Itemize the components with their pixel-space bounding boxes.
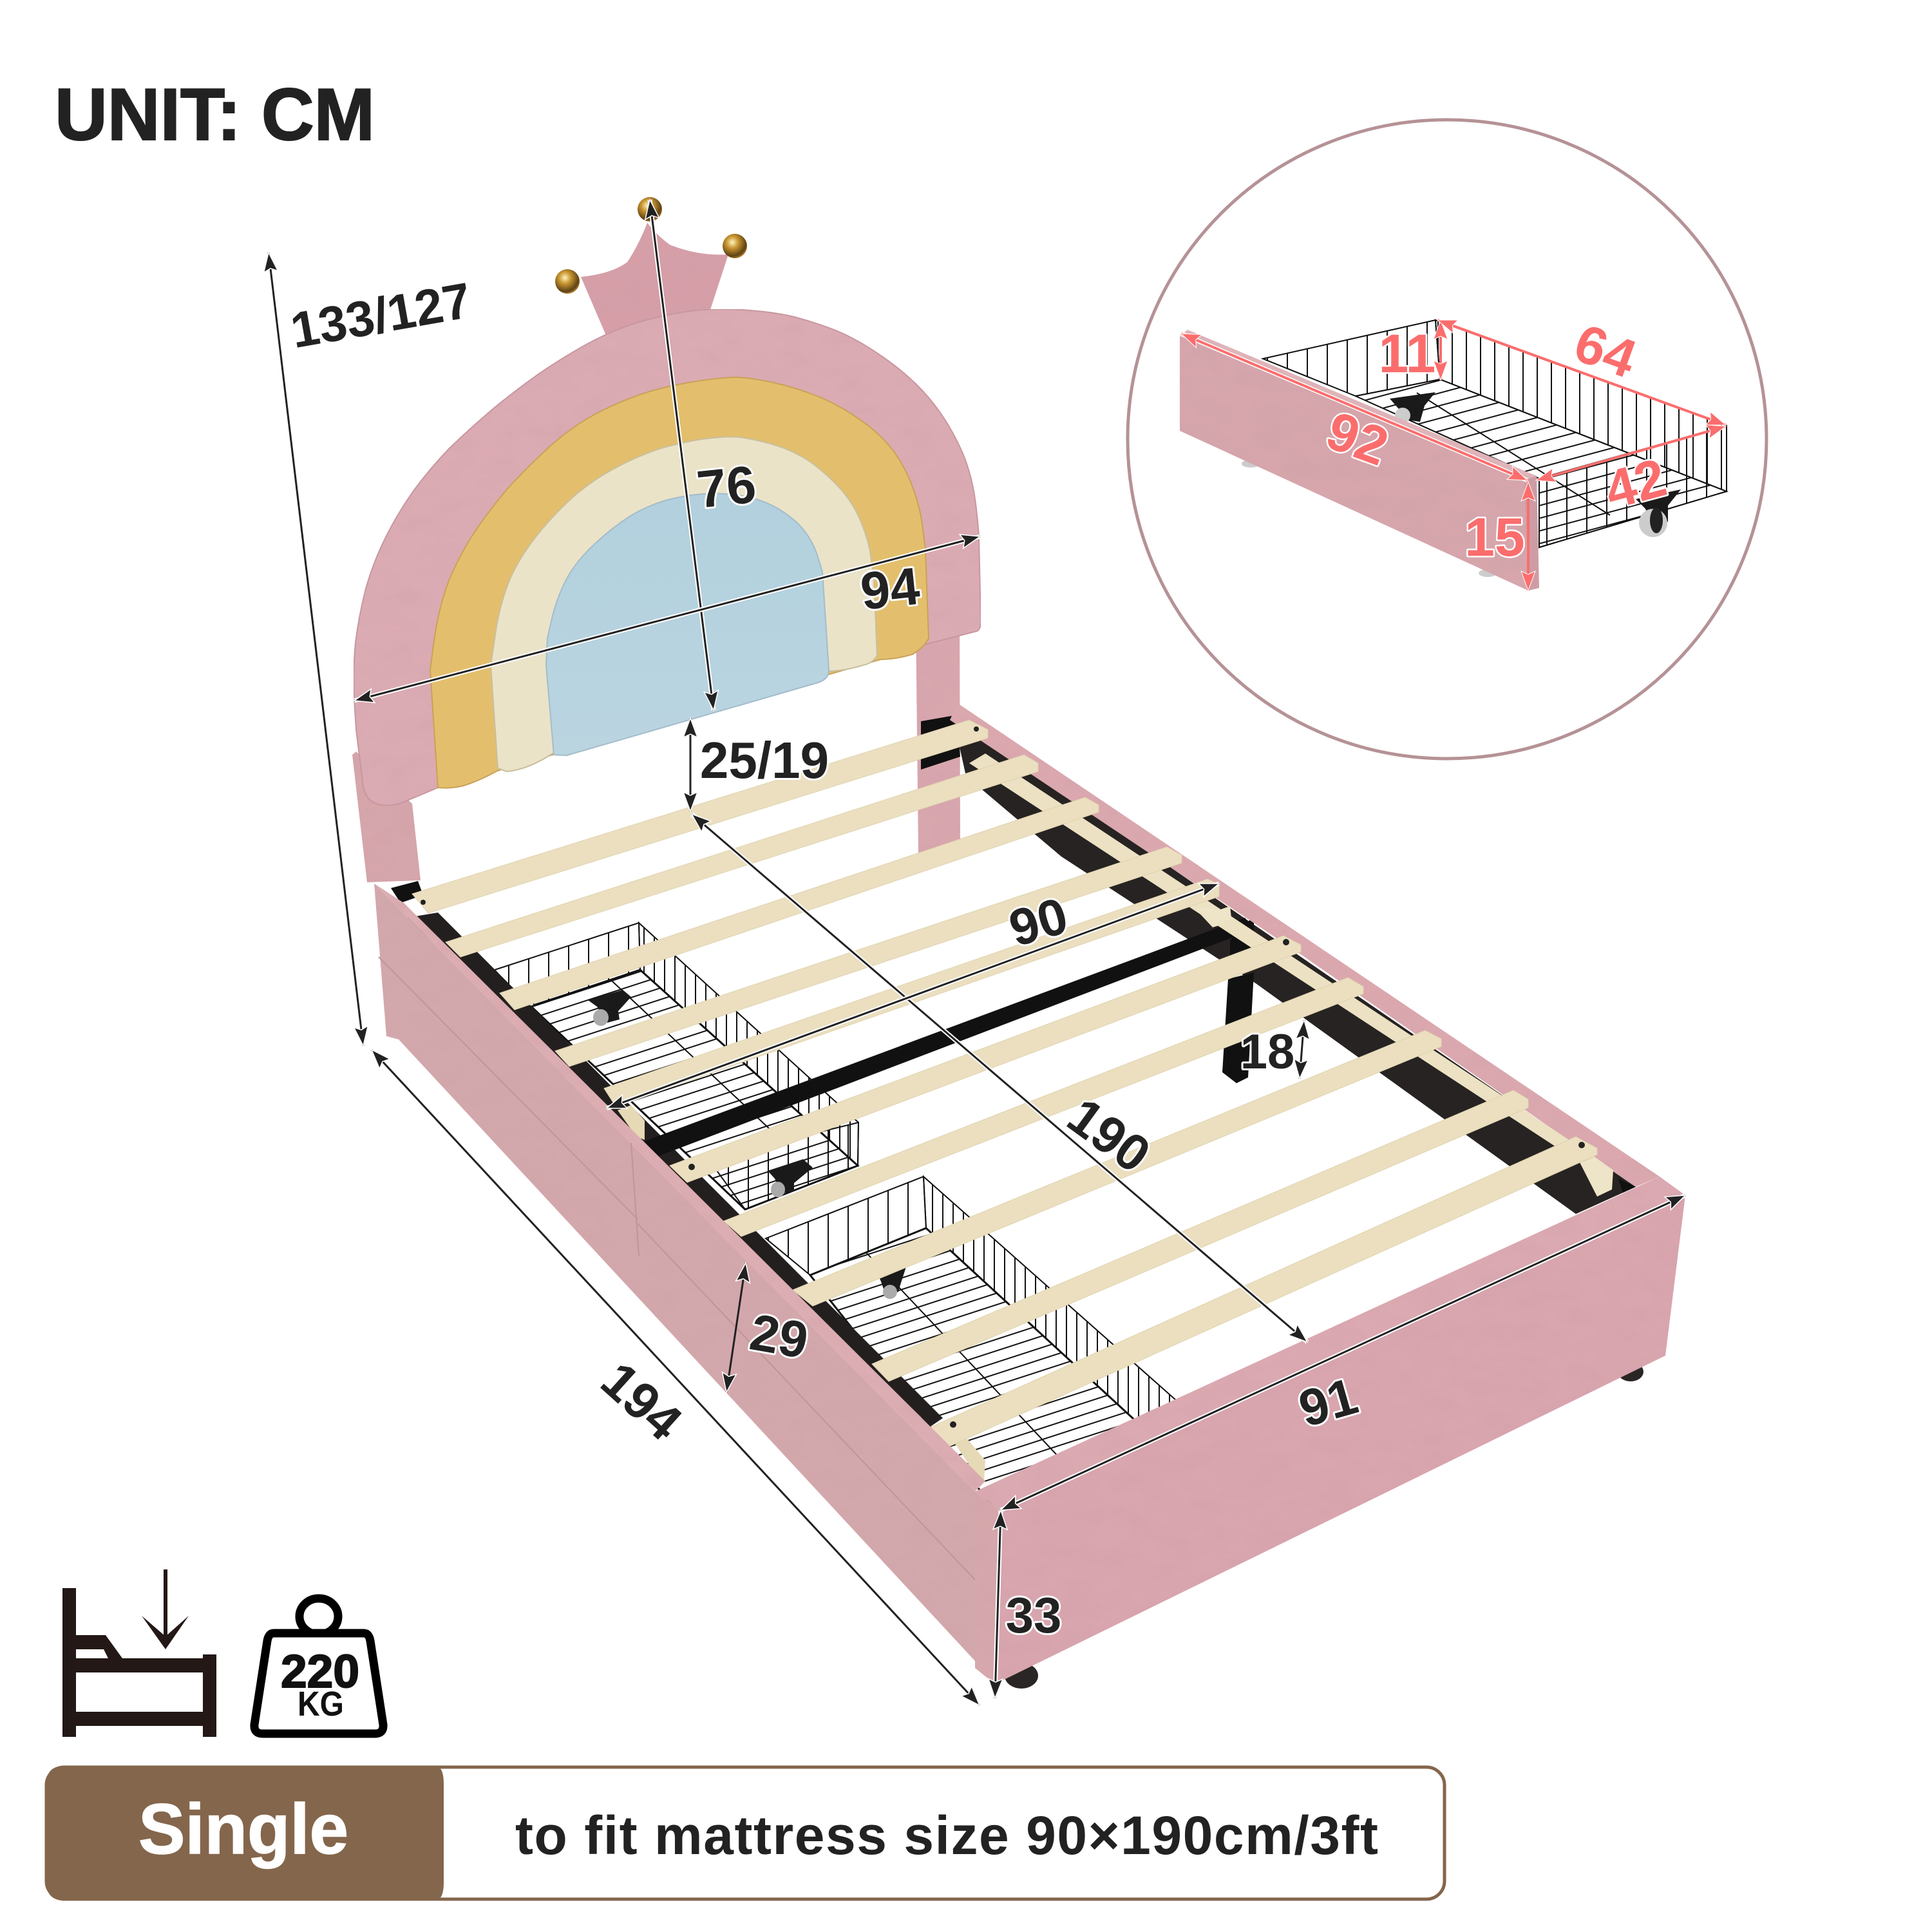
inset drawer front panel	[1180, 330, 1539, 591]
arrow: overall width	[1001, 1195, 1685, 1510]
bed feet	[1005, 1362, 1643, 1689]
drawer detail circle	[1128, 120, 1766, 759]
label 94: 94	[858, 557, 923, 621]
size banner	[46, 1766, 1444, 1900]
inset label 15: 15	[1464, 507, 1525, 567]
wire drawer basket 2	[766, 1177, 1177, 1513]
headboard outer arch	[354, 309, 981, 806]
wooden slats	[412, 720, 1597, 1446]
label 91: 91	[1293, 1367, 1363, 1438]
drawer seams	[379, 957, 975, 1580]
icon: weight 220 kg	[254, 1598, 383, 1734]
arrow: inner width	[607, 884, 1219, 1108]
inset label 42: 42	[1598, 446, 1672, 520]
inset label 11: 11	[1379, 323, 1435, 384]
arrow: overall height	[269, 252, 363, 1046]
label 76: 76	[694, 455, 759, 520]
arrow: underbed height	[1300, 1020, 1304, 1079]
metal frame: side strips, cross bar, centre leg	[391, 715, 1636, 1426]
banner label Single: Single	[138, 1790, 348, 1869]
icon: weight 220 kg: KG	[298, 1685, 344, 1723]
inset arrow: basket length	[1437, 320, 1726, 425]
label 33: 33	[1006, 1587, 1061, 1643]
label 25/19: 25/19	[700, 732, 829, 789]
arrow: inner length	[692, 814, 1307, 1342]
wire drawer basket 1	[495, 923, 858, 1209]
icon: bed load	[62, 1569, 216, 1737]
label 133/127: 133/127	[287, 272, 475, 359]
side wood beam and blocks	[618, 753, 1613, 1481]
rainbow yellow band	[430, 377, 929, 788]
arrow: rail height	[726, 1263, 746, 1392]
slat screws	[421, 726, 1585, 1428]
label 90: 90	[1003, 887, 1074, 958]
headboard posts	[352, 605, 960, 882]
inset wire basket	[1242, 320, 1727, 577]
inset arrow: basket width	[1536, 426, 1726, 480]
inset arrow: basket height	[1439, 320, 1442, 380]
rainbow cream band	[491, 437, 877, 772]
bed illustration	[352, 197, 1685, 1689]
arrow: bed height	[995, 1510, 1001, 1698]
label 190: 190	[1057, 1087, 1160, 1184]
label 194: 194	[591, 1351, 693, 1452]
inset label 92: 92	[1319, 400, 1396, 477]
foot board	[975, 1177, 1685, 1684]
arrow: headboard width	[354, 536, 980, 701]
headboard crown	[555, 197, 747, 341]
banner text: to fit mattress size 90×190cm/3ft	[515, 1805, 1378, 1866]
rainbow blue panel	[546, 493, 829, 755]
far side rail	[950, 703, 1660, 1187]
banner brown tab	[46, 1766, 444, 1900]
inset label 64: 64	[1567, 312, 1644, 390]
inset arrow: drawer panel height	[1527, 482, 1530, 591]
label 18: 18	[1240, 1025, 1294, 1079]
label 29: 29	[746, 1303, 812, 1369]
circle outline	[1128, 120, 1766, 759]
icon: weight 220 kg: 220	[281, 1646, 359, 1698]
corner bracket	[1618, 1179, 1636, 1193]
title: UNIT: CM	[55, 74, 375, 156]
inset arrow: drawer width	[1181, 334, 1528, 480]
banner outline	[46, 1767, 1444, 1899]
arrow: clearance	[689, 718, 692, 811]
arrow: headboard height	[650, 200, 714, 710]
arrow: overall length	[372, 1050, 980, 1705]
side rail with drawers	[374, 884, 990, 1678]
